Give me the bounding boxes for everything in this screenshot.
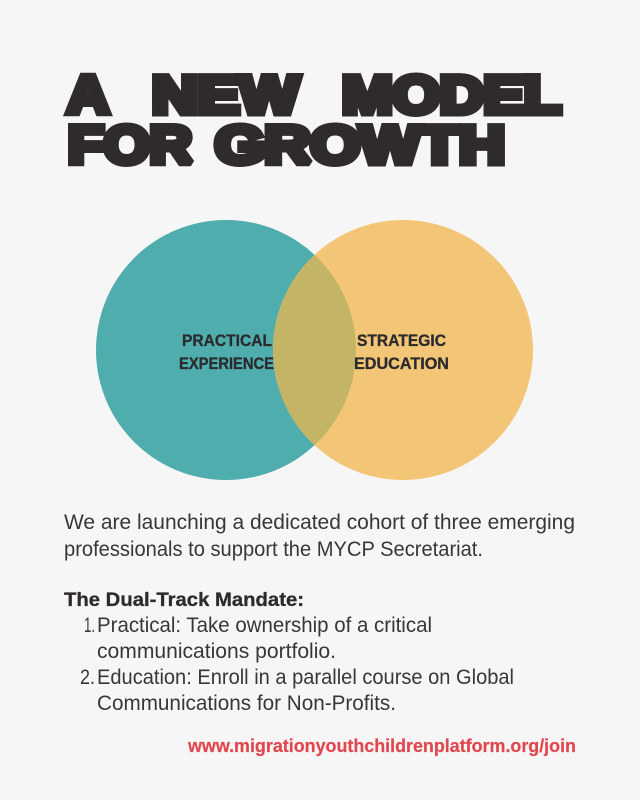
intro paragraph: We are launching a dedicated cohort of three emerging bbox=[64, 511, 575, 534]
intro paragraph: professionals to support the MYCP Secretariat. bbox=[64, 538, 483, 561]
title: A bbox=[67, 66, 109, 125]
list item 2: Communications for Non-Profits. bbox=[97, 692, 396, 715]
list item 1 bbox=[84, 614, 432, 663]
venn diagram bbox=[96, 220, 533, 480]
label: strategic education: STRATEGIC bbox=[357, 332, 446, 350]
label: practical experience: EXPERIENCE bbox=[179, 355, 274, 373]
venn overlap bbox=[273, 255, 356, 445]
label: practical experience: PRACTICAL bbox=[182, 332, 272, 350]
title: FOR bbox=[68, 116, 192, 175]
label: strategic education: EDUCATION bbox=[354, 355, 449, 373]
label: practical experience bbox=[179, 332, 274, 373]
list item 2: 2. bbox=[80, 666, 95, 689]
title: MODEL bbox=[342, 66, 561, 125]
title: GROWTH bbox=[215, 116, 505, 175]
title bbox=[67, 66, 561, 175]
list item 2: Education: Enroll in a parallel course on Global bbox=[97, 666, 514, 689]
list item 1: communications portfolio. bbox=[97, 640, 336, 663]
mandate heading: The Dual-Track Mandate: bbox=[64, 589, 304, 611]
circle: strategic education bbox=[273, 220, 533, 480]
intro paragraph bbox=[64, 511, 575, 561]
title: NEW bbox=[152, 66, 300, 125]
circle: practical experience bbox=[96, 220, 356, 480]
label: strategic education bbox=[354, 332, 449, 373]
list item 2 bbox=[80, 666, 514, 715]
mandate list bbox=[80, 614, 514, 715]
website link: www.migrationyouthchildrenplatform.org/join bbox=[187, 736, 576, 756]
list item 1: 1. bbox=[84, 614, 95, 637]
list item 1: Practical: Take ownership of a critical bbox=[97, 614, 432, 637]
